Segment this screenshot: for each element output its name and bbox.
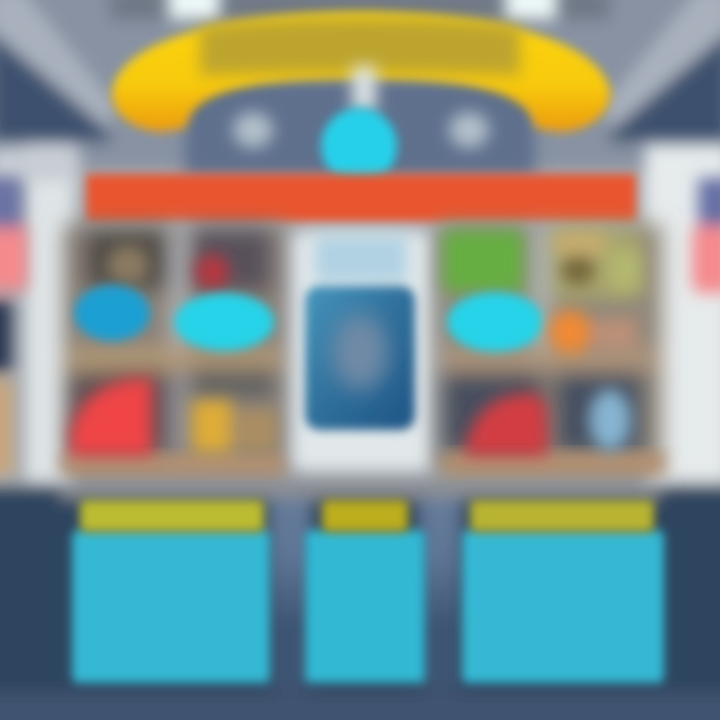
phone top glow [315, 236, 407, 282]
shelf unit frame [438, 224, 662, 476]
panel: centre phone display [293, 232, 431, 470]
product: light blue goods right [589, 389, 631, 451]
flag: right [692, 178, 720, 293]
panel: centre info card [305, 500, 425, 683]
product: red goods top [195, 254, 229, 290]
panel: right info card [462, 500, 664, 683]
panel: left info card [72, 500, 270, 683]
product: blue sign left [74, 285, 150, 341]
lamps on sign panel [233, 66, 489, 148]
flag: left [0, 178, 27, 475]
panel: right shelves [438, 224, 664, 476]
product: green goods right [443, 230, 523, 292]
product: cyan sign left [174, 293, 274, 351]
title band [200, 18, 520, 76]
white columns [0, 145, 720, 480]
left card heading [80, 500, 264, 532]
icon: water drop [321, 108, 397, 184]
centre card body [305, 530, 425, 683]
product: yellow goods left [192, 400, 276, 452]
sign panel behind banner [185, 80, 535, 175]
product: mixed goods top right [555, 232, 640, 290]
phone screen emblem [332, 314, 388, 390]
ceiling lights [168, 0, 557, 20]
product: cyan sign right [447, 292, 543, 352]
product: red goods left [70, 378, 152, 456]
centre card heading [322, 500, 408, 532]
shelf unit frame [64, 224, 286, 476]
red header bar [86, 174, 636, 222]
right card heading [470, 500, 654, 532]
product: orange goods right [548, 310, 637, 354]
left card body [72, 530, 270, 683]
panel: left shelves [62, 224, 286, 476]
shelf base right [442, 453, 664, 473]
product: tan goods left [106, 245, 150, 285]
phone screen [305, 286, 415, 430]
yellow title banner [112, 12, 610, 132]
right card body [462, 530, 664, 683]
product: red goods right [464, 393, 548, 456]
phone body [293, 232, 431, 470]
shelf base left [62, 455, 284, 473]
